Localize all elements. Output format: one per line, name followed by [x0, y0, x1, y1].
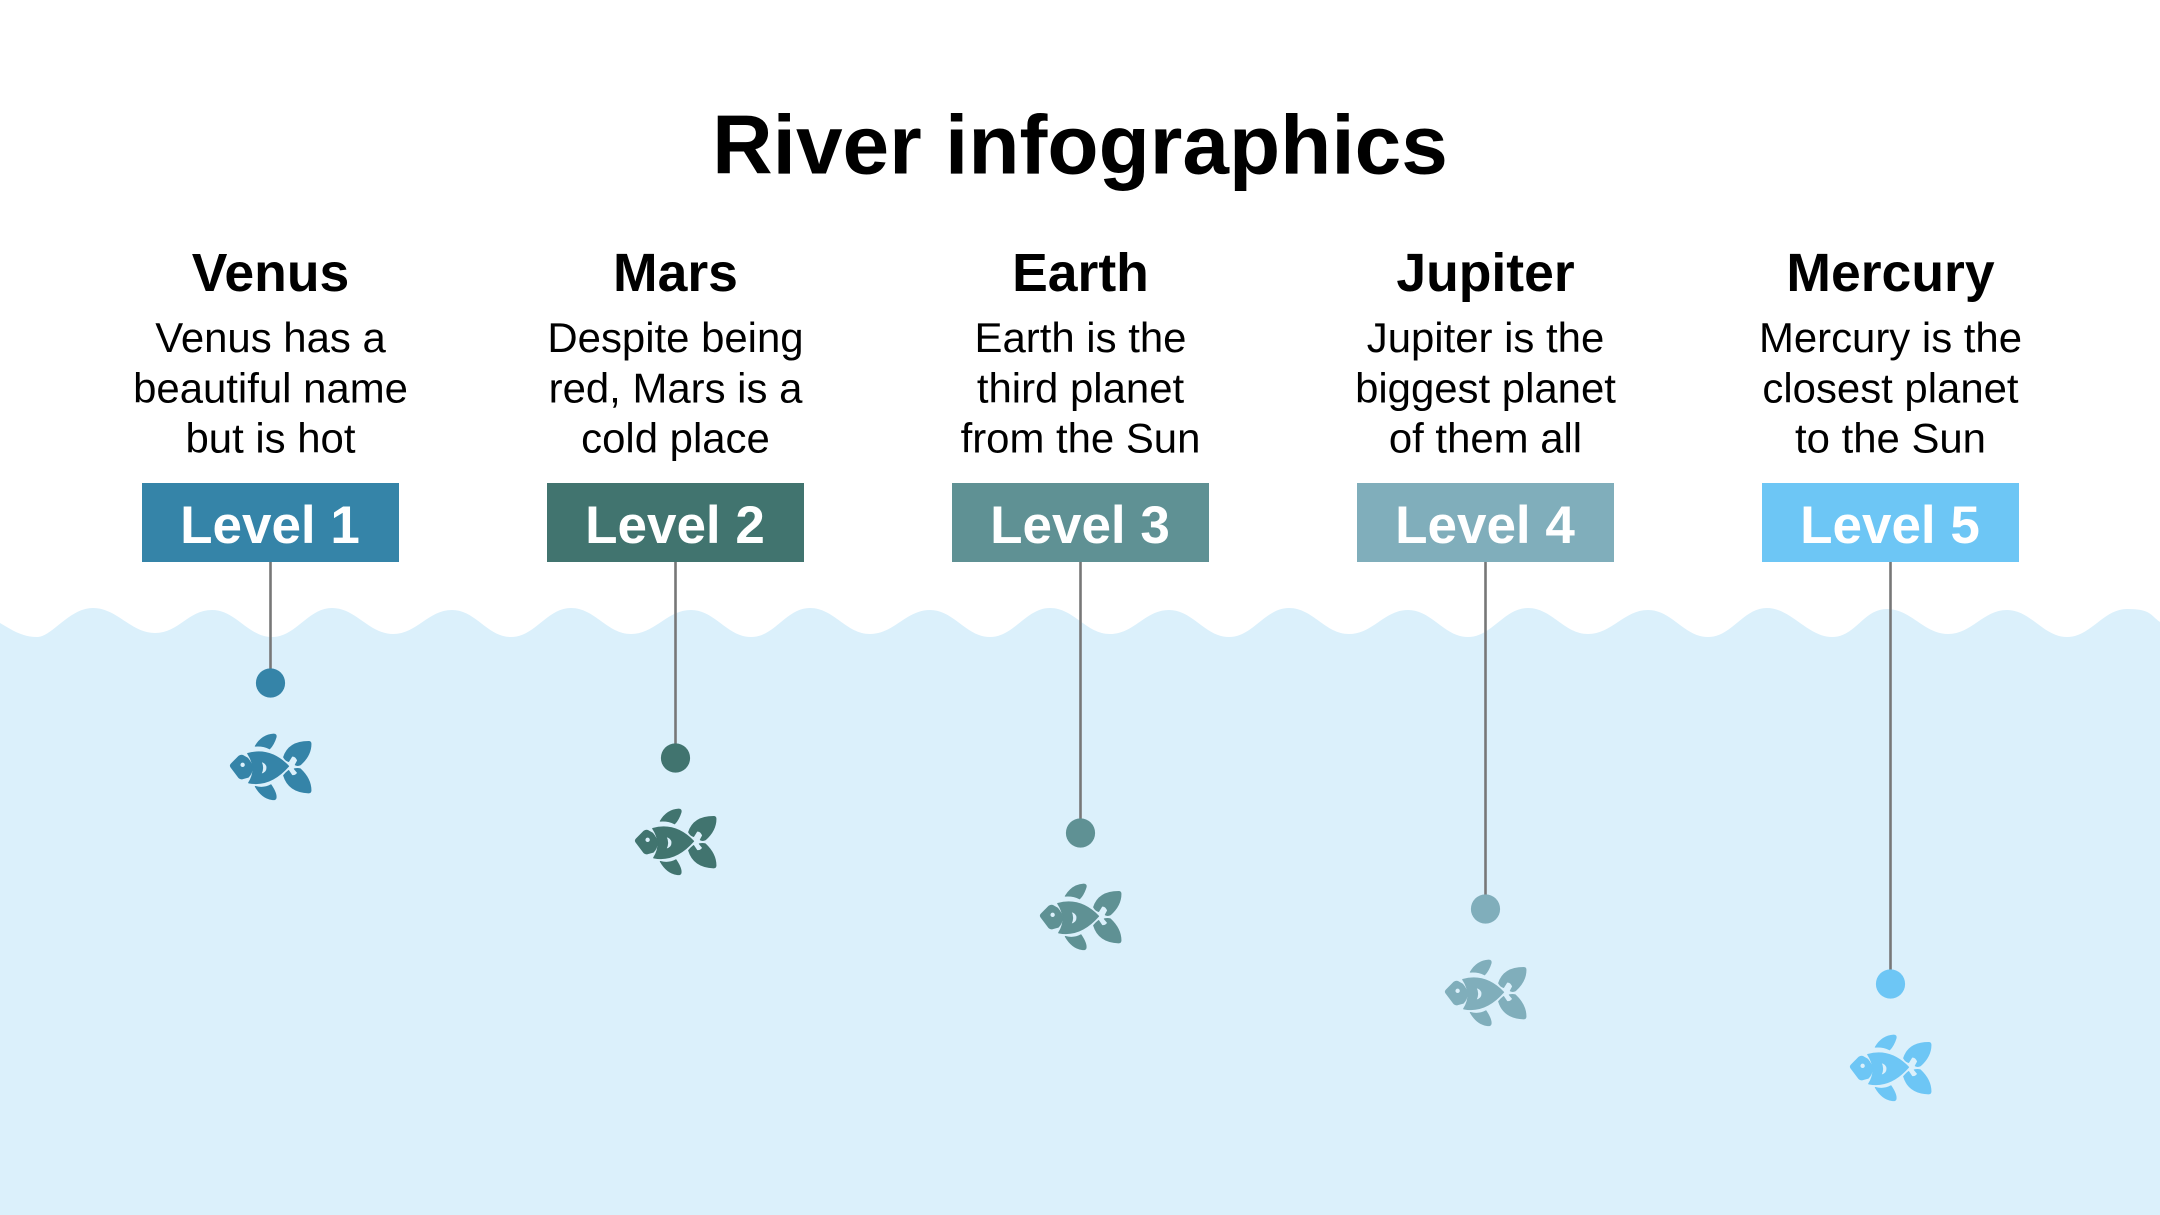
description: Mercury: to the Sun [1795, 415, 1986, 462]
heading: Jupiter: Jupiter [1396, 244, 1575, 303]
heading: Mercury: Mercury [1786, 244, 1995, 303]
description: Mercury: Mercury is the [1759, 314, 2022, 361]
description: Jupiter: of them all [1389, 415, 1582, 462]
dot: level 1 [256, 668, 285, 698]
connector line: level 2 [674, 562, 677, 758]
description: Venus: beautiful name [133, 364, 408, 411]
label box: Level 3 [952, 483, 1209, 562]
water background with wavy surface [0, 608, 2160, 1215]
icon: fish, level 1 [230, 734, 311, 800]
connector line: level 3 [1079, 562, 1082, 833]
description: Mars: Despite being [547, 314, 804, 361]
description: Mars: cold place [581, 415, 770, 462]
label box: Level 4 [1357, 483, 1614, 562]
description: Earth: from the Sun [961, 415, 1200, 462]
description: Venus: but is hot [186, 415, 356, 462]
connector line: level 1 [269, 562, 272, 683]
title: River infographics [712, 98, 1448, 192]
description: Mercury: closest planet [1762, 364, 2019, 411]
column: Earth, level 3 [952, 244, 1209, 950]
dot: level 2 [661, 743, 690, 773]
description: Mars: red, Mars is a [549, 364, 803, 411]
column: Mercury, level 5 [1759, 244, 2022, 1101]
connector line: level 4 [1484, 562, 1487, 909]
heading: Earth: Earth [1012, 244, 1149, 303]
description: Jupiter: Jupiter is the [1367, 314, 1604, 361]
heading: Venus: Venus [192, 244, 349, 303]
label box: Level 1: Level 1 [180, 496, 360, 555]
column: Mars, level 2 [547, 244, 804, 875]
dot: level 4 [1471, 894, 1500, 924]
icon: fish, level 4 [1445, 960, 1526, 1026]
dot: level 5 [1876, 969, 1905, 999]
description: Earth: third planet [977, 364, 1184, 411]
description: Venus: Venus has a [155, 314, 386, 361]
column: Venus, level 1 [133, 244, 408, 800]
description: Earth: Earth is the [975, 314, 1186, 361]
icon: fish, level 2 [635, 809, 716, 875]
description: Jupiter: biggest planet [1355, 364, 1616, 411]
label box: Level 5 [1762, 483, 2019, 562]
label box: Level 1 [142, 483, 399, 562]
label box: Level 2: Level 2 [585, 496, 765, 555]
label box: Level 3: Level 3 [990, 496, 1170, 555]
connector line: level 5 [1889, 562, 1892, 984]
column: Jupiter, level 4 [1355, 244, 1616, 1026]
icon: fish, level 5 [1850, 1035, 1931, 1101]
label box: Level 4: Level 4 [1395, 496, 1575, 555]
label box: Level 2 [547, 483, 804, 562]
icon: fish, level 3 [1040, 884, 1121, 950]
label box: Level 5: Level 5 [1800, 496, 1980, 555]
dot: level 3 [1066, 818, 1095, 848]
heading: Mars: Mars [613, 244, 738, 303]
